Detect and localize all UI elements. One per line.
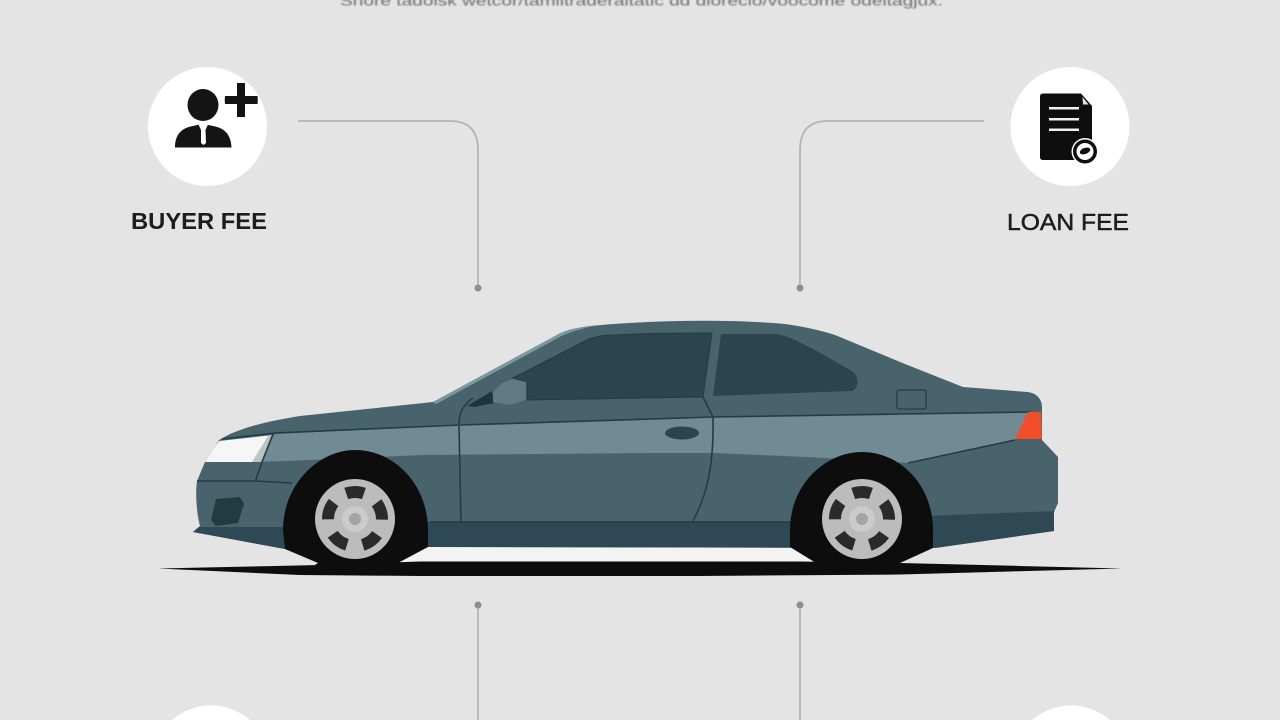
rear side window (713, 334, 858, 396)
car illustration (158, 321, 1122, 576)
front bumper base (193, 527, 285, 549)
car body (193, 321, 1058, 549)
body lines (197, 397, 1030, 522)
rear wheel (790, 452, 933, 572)
front wheel (283, 450, 428, 572)
connector: top right (796, 121, 984, 292)
panel: buyer fee (131, 67, 267, 234)
icon: loan fee circle (1010, 67, 1130, 186)
door handle (665, 426, 699, 440)
tail light (1015, 412, 1042, 439)
body panels (190, 324, 1056, 552)
icon: bottom right circle, cropped (1032, 705, 1110, 720)
front side window (513, 333, 712, 400)
fuel door (897, 390, 926, 409)
connector: top left (298, 121, 482, 292)
roof highlight (433, 324, 600, 404)
connector: bottom left (474, 602, 482, 720)
icon: bottom left circle, cropped (172, 705, 250, 720)
panel: loan fee (1007, 67, 1130, 235)
dark wedge under mirror (467, 391, 494, 407)
ground highlight strip (270, 534, 1000, 564)
heading: buyer fee: BUYER FEE (131, 208, 267, 234)
lower sill (425, 522, 800, 548)
side mirror (493, 379, 526, 405)
icon: buyer fee circle (148, 67, 267, 186)
light body band (257, 412, 1030, 463)
heading: loan fee: LOAN FEE (1007, 209, 1129, 235)
ground shadow (158, 562, 1122, 576)
connector: bottom right (796, 602, 804, 720)
fog vent (211, 497, 244, 526)
headlight (203, 435, 273, 462)
rear sill (932, 511, 1054, 548)
